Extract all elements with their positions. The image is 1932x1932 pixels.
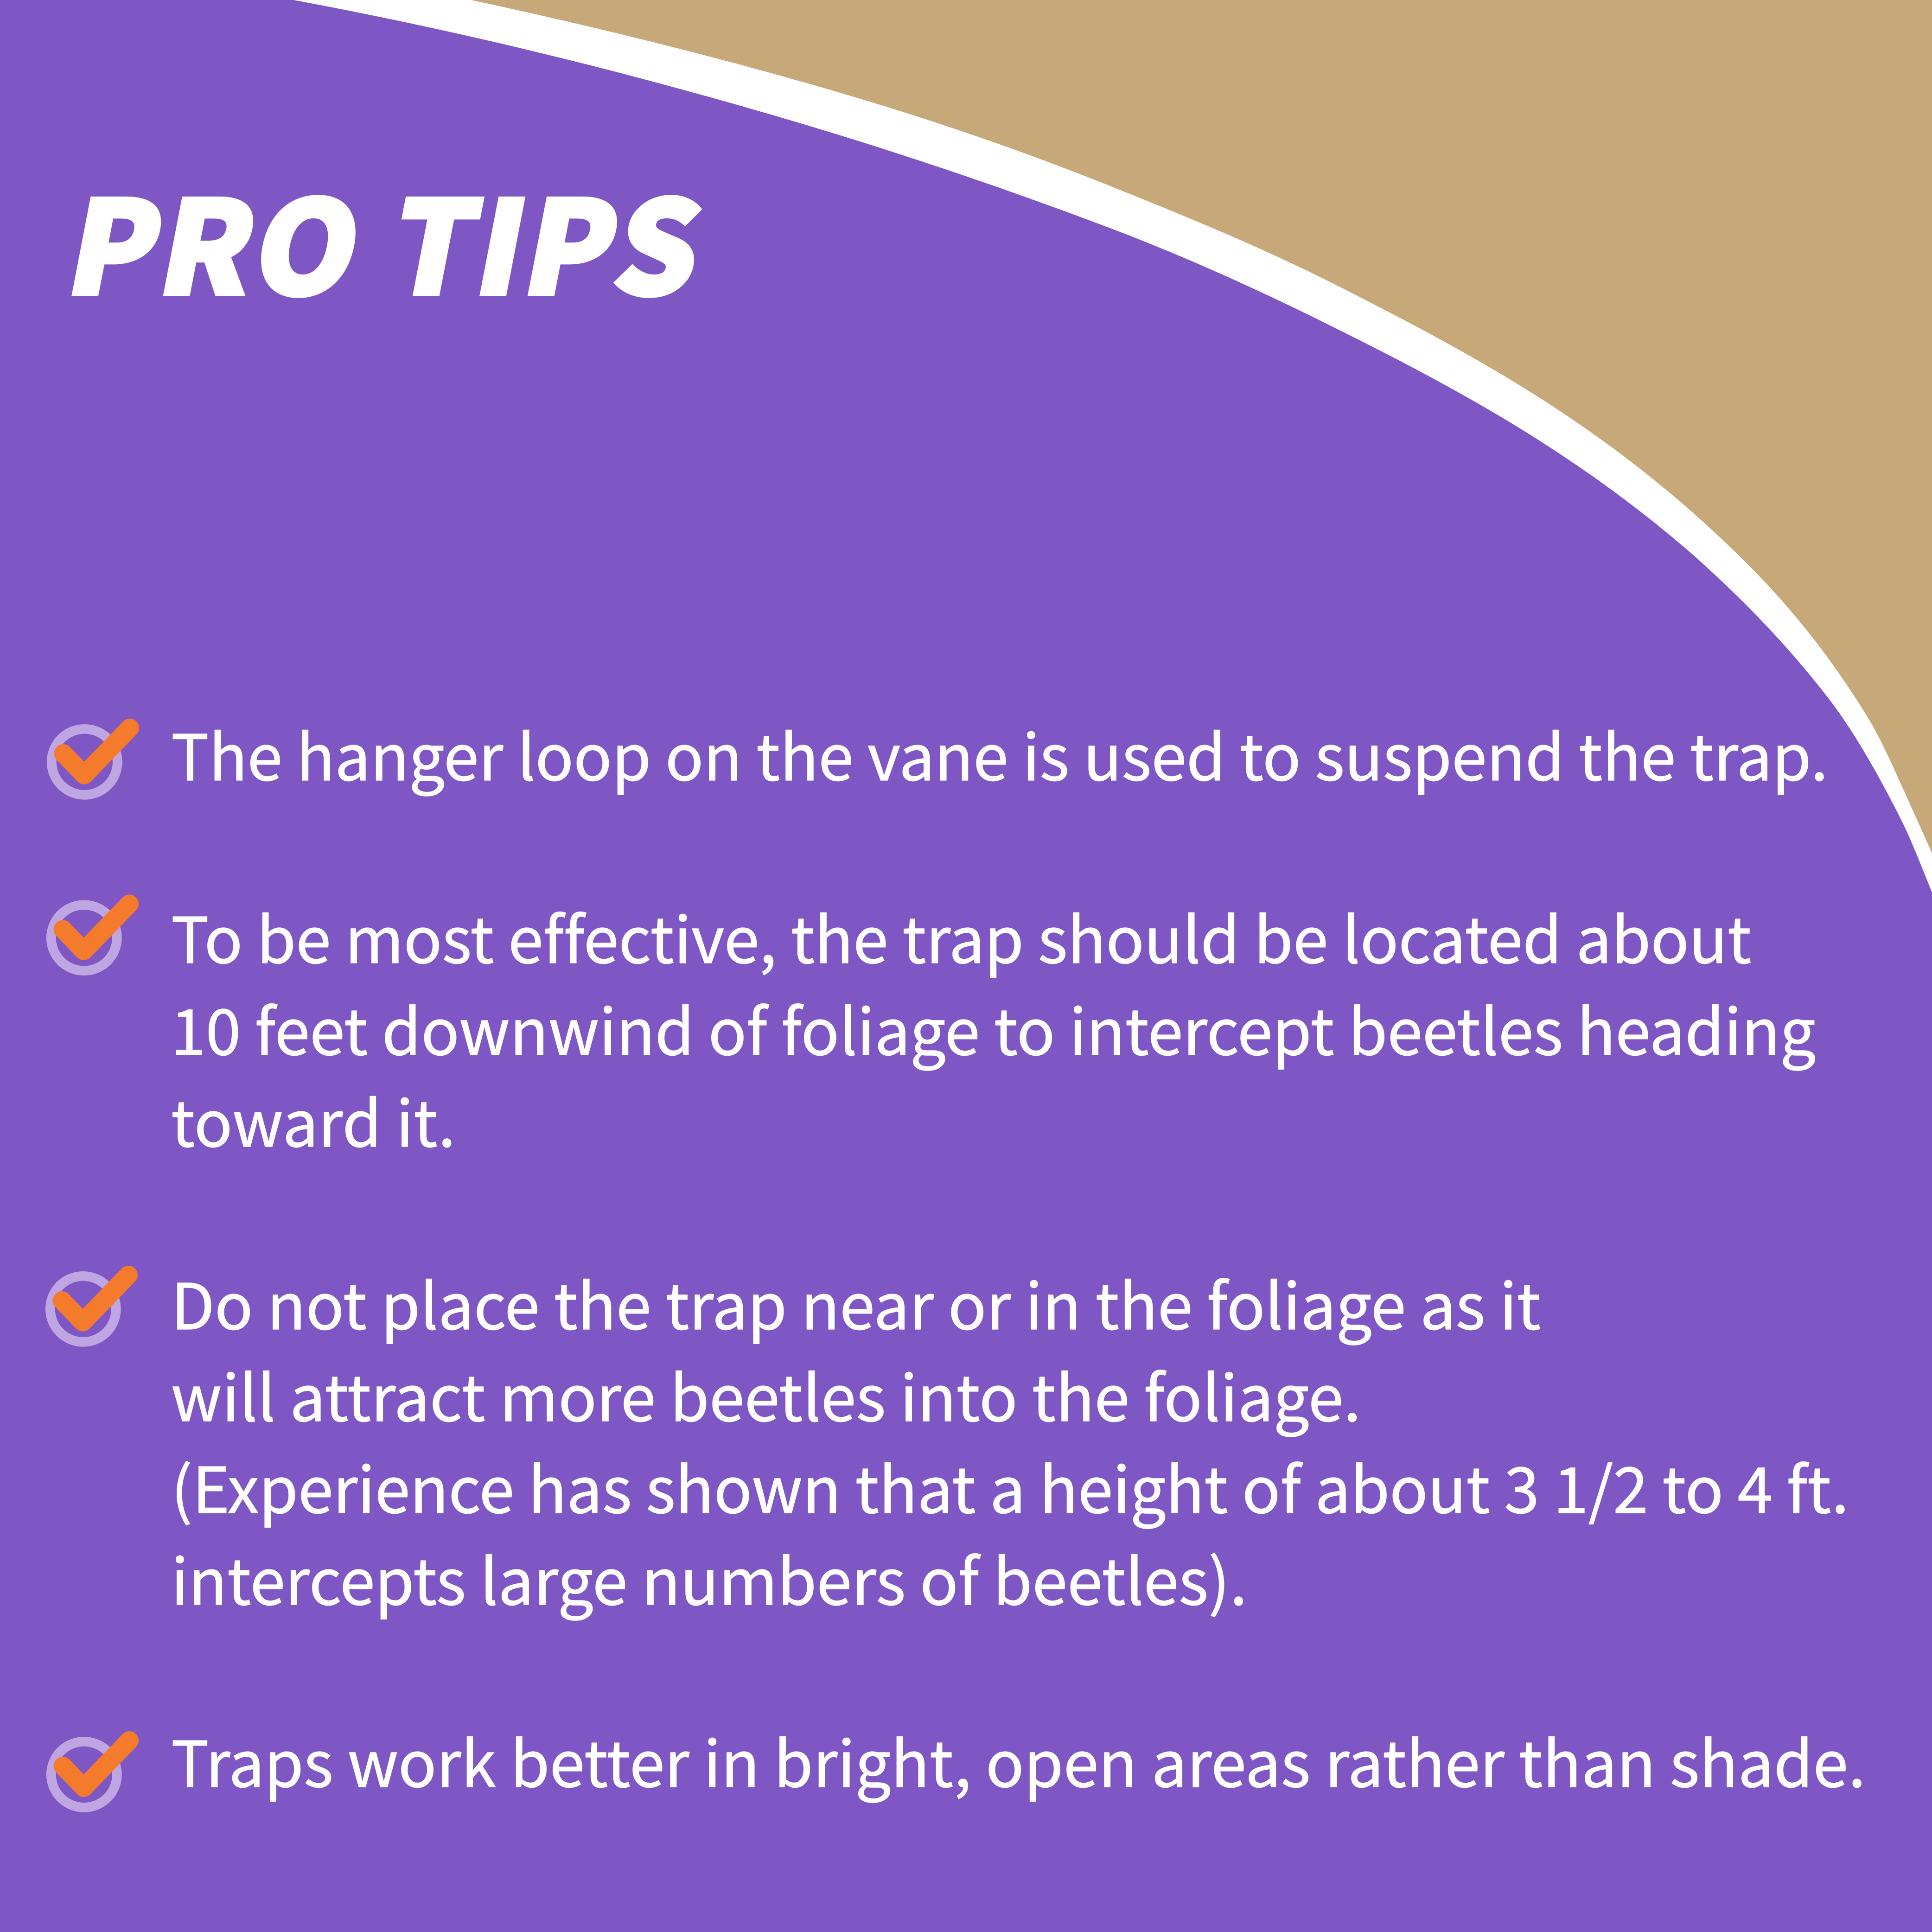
tip 1 text: The hanger loop on the vane is used to suspend the trap. [171,708,1828,799]
tip 4 text: Traps work better in bright, open areas rather than shade. [171,1714,1866,1805]
tan corner shape [471,0,1932,853]
tip 3 text: Do not place the trap near or in the foliage as it [171,1256,1541,1348]
tip 2 text: 10 feet downwind of foliage to intercept beetles heading [171,982,1816,1073]
tip 3 text: intercepts large numbers of beetles). [171,1532,1247,1623]
icon: check 2 [51,904,129,971]
icon: check 4 [51,1741,129,1807]
icon: check 1 [51,728,130,795]
tip 2 text: toward it. [171,1074,456,1165]
tip 2 text: To be most effective, the trap should be located about [171,890,1751,982]
tip 3 text [171,1256,1849,1623]
white curved band [293,0,1932,893]
icon: check 3 [50,1275,128,1342]
tip 3 text: will attract more beetles into the foliage. [171,1348,1361,1440]
title: PRO TIPS [55,146,723,332]
tip 2 text [171,890,1816,1165]
tip 3 text: (Experience has shown that a height of about 3 1/2 to 4 ft. [171,1440,1849,1531]
